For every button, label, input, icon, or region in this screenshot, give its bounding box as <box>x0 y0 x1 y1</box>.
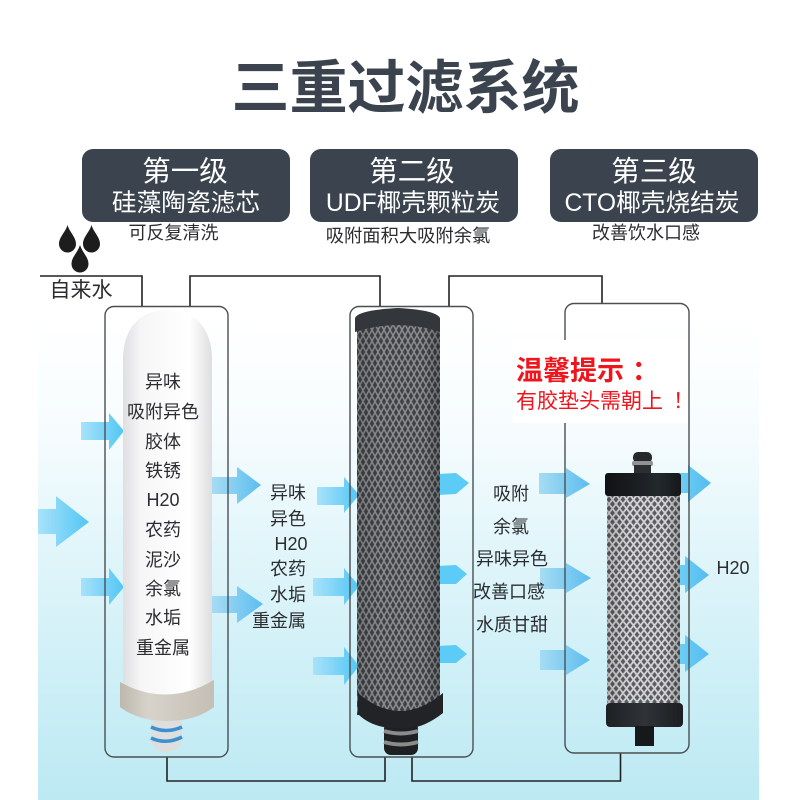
arrows: flow out of the third filter <box>676 465 711 672</box>
arrows: flow out of the second filter <box>438 473 469 663</box>
first filter contaminants list: 水垢 <box>145 608 181 628</box>
panel: stage three header: CTO椰壳烧结炭 <box>564 189 740 217</box>
cartridge end cap <box>120 680 214 721</box>
arrows: flow out of the first filter <box>212 467 263 623</box>
first filter contaminants list: 铁锈 <box>145 461 181 481</box>
stage one caption: 可反复清洗 <box>128 223 218 243</box>
second stage contaminants list: 农药 <box>270 559 306 579</box>
top cap <box>355 308 440 332</box>
top nozzle <box>632 452 653 474</box>
callout: installation tip <box>513 340 694 423</box>
icon: water drops <box>59 225 100 272</box>
third stage effects list <box>473 484 548 635</box>
second stage contaminants list: H20 <box>274 534 308 554</box>
first filter contaminants list: 余氯 <box>145 579 181 599</box>
cylinder shading <box>357 325 440 715</box>
first filter contaminants list: 吸附异色 <box>127 402 199 422</box>
third stage effects list: 改善口感 <box>473 582 545 602</box>
cartridge body <box>123 310 212 700</box>
cartridge nozzle <box>151 714 182 752</box>
mesh body <box>607 494 680 704</box>
second stage contaminants list: 异味 <box>270 483 306 503</box>
arrows: flow into the third filter <box>539 468 591 675</box>
panel: third filter housing <box>565 304 689 753</box>
first filter contaminants list: H20 <box>146 490 180 510</box>
panel: stage two header: UDF椰壳颗粒炭 <box>326 189 500 217</box>
water flow pipes <box>40 276 620 781</box>
third stage effects list: 异味异色 <box>476 549 548 569</box>
bottom cap <box>606 703 683 727</box>
tap water label: 自来水 <box>50 279 112 302</box>
panel: stage two header <box>310 149 518 222</box>
first filter contaminants list: 泥沙 <box>145 550 181 570</box>
title: 三重过滤系统 <box>231 56 580 121</box>
callout: installation tip: 有胶垫头需朝上 ！ <box>516 390 694 413</box>
callout: installation tip: 温馨提示 ： <box>516 356 659 386</box>
panel: stage one header <box>82 149 290 222</box>
arrows: flow into the second filter <box>313 477 359 685</box>
panel: stage one header: 硅藻陶瓷滤芯 <box>112 189 260 217</box>
second stage contaminants list: 重金属 <box>252 611 306 631</box>
output water label: H20 <box>716 558 750 578</box>
third stage effects list: 余氯 <box>493 517 529 537</box>
third filter: sintered carbon cartridge <box>605 452 683 746</box>
panel: stage two header: 第二级 <box>369 156 455 188</box>
first filter contaminants list <box>127 372 199 658</box>
second stage contaminants list <box>252 483 308 631</box>
panel: stage three header: 第三级 <box>611 156 697 188</box>
cylinder shading <box>607 494 680 704</box>
arrows: flow into the first filter <box>38 413 124 605</box>
top cap <box>605 473 681 496</box>
third stage effects list: 吸附 <box>493 484 529 504</box>
third stage effects list: 水质甘甜 <box>476 615 548 635</box>
mesh body <box>357 325 440 715</box>
stage three caption: 改善饮水口感 <box>592 223 700 243</box>
panel: second filter housing <box>350 306 473 757</box>
first filter contaminants list: 农药 <box>145 520 181 540</box>
first filter contaminants list: 胶体 <box>145 432 181 452</box>
panel: stage three header <box>550 149 758 222</box>
first filter contaminants list: 异味 <box>145 372 181 392</box>
stage two caption: 吸附面积大吸附余氯 <box>326 225 490 246</box>
panel: first filter housing <box>105 306 228 757</box>
second stage contaminants list: 水垢 <box>270 585 306 605</box>
bottom cap <box>358 693 443 728</box>
first filter contaminants list: 重金属 <box>136 638 190 658</box>
cartridge nozzle <box>384 722 418 755</box>
outlet stem <box>635 726 654 746</box>
first filter: ceramic cartridge <box>120 310 214 752</box>
panel: stage one header: 第一级 <box>142 156 228 188</box>
second stage contaminants list: 异色 <box>270 509 306 529</box>
second filter: carbon block cartridge <box>355 308 443 755</box>
